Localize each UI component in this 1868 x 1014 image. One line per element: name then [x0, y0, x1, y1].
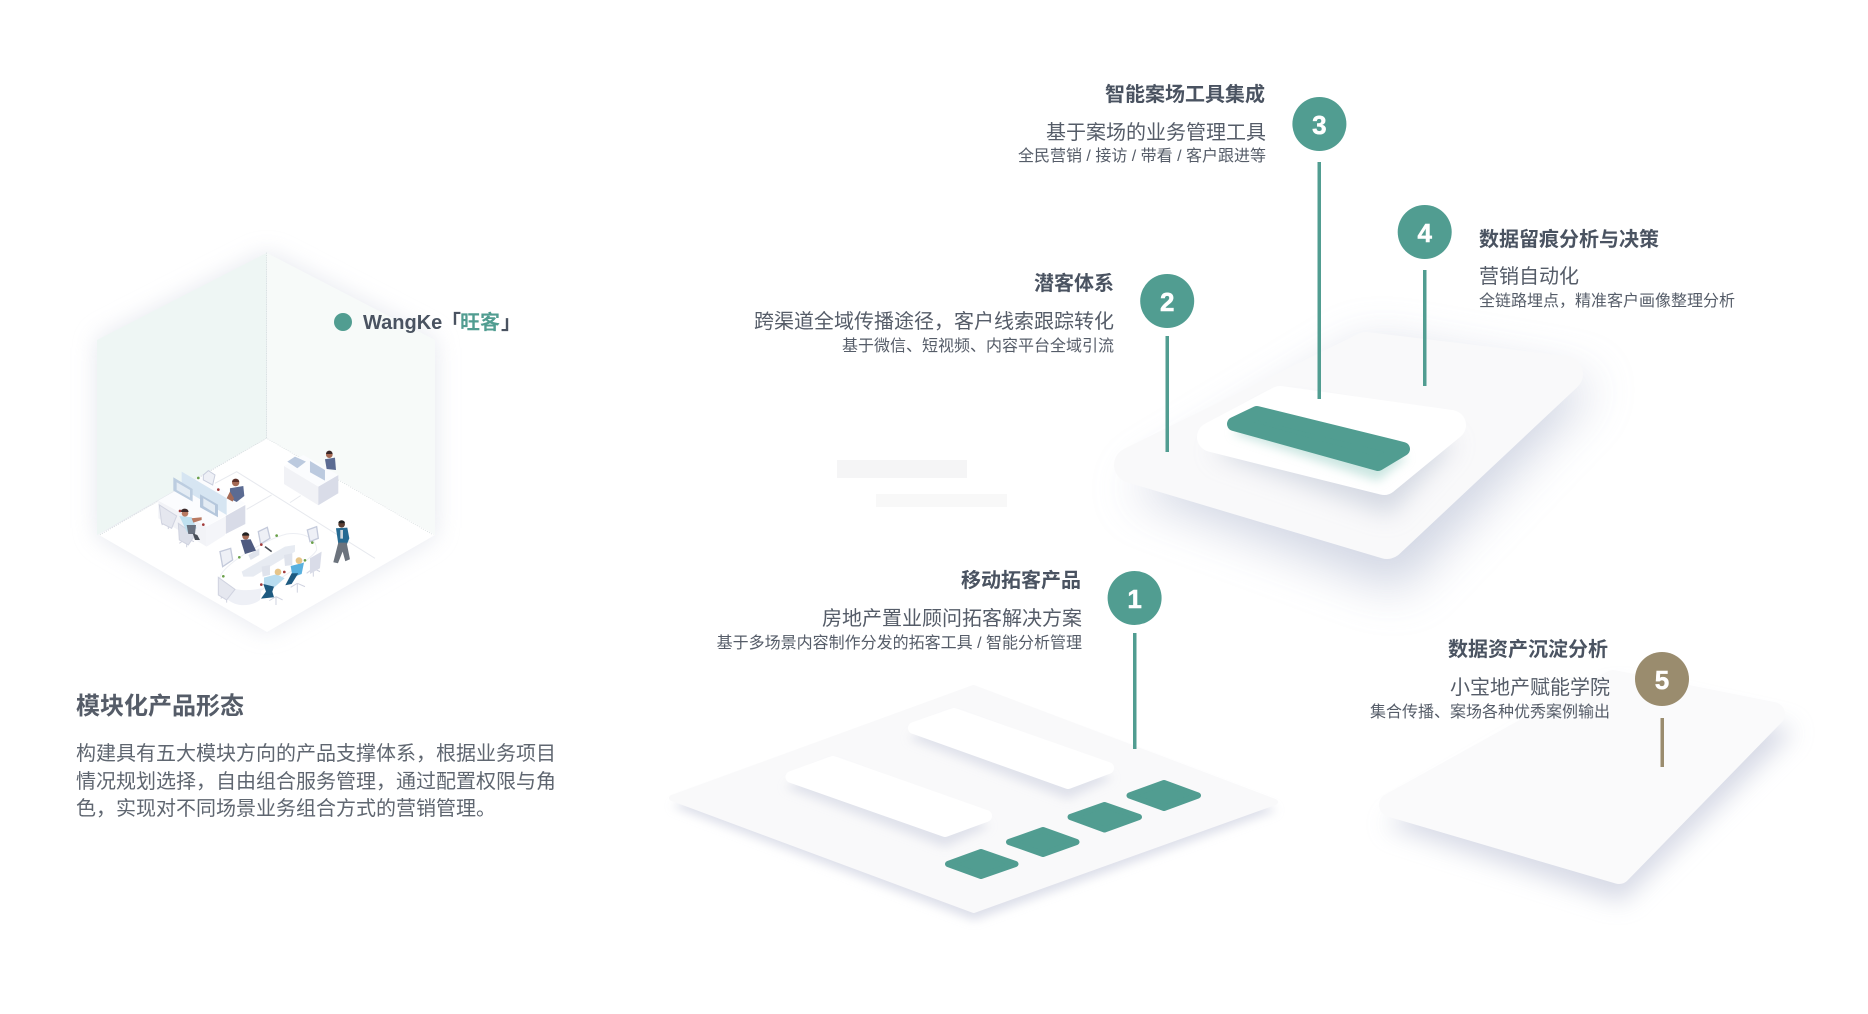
- callout 3: smart sales-office tools: [1018, 84, 1266, 165]
- callout 4: data trace analysis: [1479, 228, 1735, 310]
- panel: office room illustration: [97, 253, 435, 632]
- icon: brand dot: [334, 313, 352, 331]
- teal tiles: [948, 783, 1198, 876]
- callout 4 detail: 全链路埋点，精准客户画像整理分析: [1479, 293, 1735, 310]
- text block: description: 构建具有五大模块方向的产品支撑体系，根据业务项目: [76, 743, 556, 765]
- callout 2 title: 潜客体系: [1034, 273, 1114, 295]
- desk cluster left: [158, 471, 245, 547]
- marker 3: [1292, 97, 1346, 151]
- marker 3: 3: [1312, 110, 1327, 140]
- meeting table: [218, 527, 322, 605]
- person: walking with phone: [333, 520, 350, 563]
- panel: lower right platform: [1385, 682, 1795, 902]
- callout 2: potential customer system: [754, 272, 1114, 355]
- callout 1 subtitle: 房地产置业顾问拓客解决方案: [822, 608, 1082, 630]
- connector line 5: [1660, 718, 1664, 767]
- connector line 2: [1166, 336, 1169, 452]
- callout 1: mobile customer acquisition: [717, 570, 1082, 652]
- marker 1: [1108, 571, 1162, 625]
- callout 1 title: 移动拓客产品: [961, 570, 1081, 592]
- marker 1: 1: [1127, 584, 1142, 614]
- person: seated at desk top: [227, 479, 244, 502]
- callout 3 title: 智能案场工具集成: [1105, 84, 1265, 106]
- floor: [99, 438, 435, 632]
- connector line 4: [1423, 270, 1426, 386]
- marker 4: 4: [1417, 218, 1432, 248]
- callout 3 detail: 全民营销 / 接访 / 带看 / 客户跟进等: [1018, 148, 1266, 165]
- inner white card: [1212, 401, 1456, 515]
- white bar lower: [785, 762, 990, 847]
- teal bar: [1232, 413, 1408, 481]
- panel: lower left platform: [672, 688, 1277, 920]
- callout 4 subtitle: 营销自动化: [1479, 266, 1579, 288]
- left wall: [97, 253, 266, 535]
- marker 5: [1635, 652, 1689, 706]
- callout 4 title: 数据留痕分析与决策: [1479, 229, 1659, 251]
- callout 5: data asset analysis: [1370, 638, 1610, 721]
- connector line 3: [1318, 162, 1321, 399]
- callout 3 subtitle: 基于案场的业务管理工具: [1046, 122, 1266, 144]
- person: blond front: [261, 569, 285, 599]
- chairs for desk cluster: [162, 520, 320, 605]
- panel: upper platform: [1130, 345, 1595, 590]
- person: dark hair at table: [241, 532, 256, 554]
- marker 4: [1398, 205, 1452, 259]
- brand label: 旺客: [460, 312, 500, 334]
- placeholder bars: [837, 460, 1007, 507]
- brand label: 「: [441, 312, 461, 334]
- text block: description: 色，实现对不同场景业务组合方式的营销管理。: [76, 798, 496, 820]
- callout 2 detail: 基于微信、短视频、内容平台全域引流: [842, 338, 1114, 355]
- callout 5 subtitle: 小宝地产赋能学院: [1450, 677, 1610, 699]
- person: seated at desk front: [179, 509, 202, 540]
- marker 5: 5: [1655, 665, 1669, 695]
- brand label: [363, 312, 521, 334]
- brand label: 」: [501, 312, 521, 334]
- callout 2 subtitle: 跨渠道全域传播途径，客户线索跟踪转化: [754, 311, 1114, 333]
- person: blond rear: [285, 557, 304, 585]
- right wall: [267, 253, 435, 535]
- heading: modular product form: 模块化产品形态: [76, 693, 244, 720]
- connector line 1: [1133, 633, 1136, 749]
- brand label: WangKe: [363, 312, 442, 334]
- callout 1 detail: 基于多场景内容制作分发的拓客工具 / 智能分析管理: [717, 635, 1082, 652]
- callout 5 title: 数据资产沉淀分析: [1448, 639, 1608, 661]
- floor lines: [215, 472, 375, 558]
- marker 2: [1140, 274, 1194, 328]
- callout 5 detail: 集合传播、案场各种优秀案例输出: [1370, 704, 1610, 721]
- text block: description: 情况规划选择，自由组合服务管理，通过配置权限与角: [76, 770, 556, 792]
- marker 2: 2: [1160, 287, 1174, 317]
- white bar upper: [908, 714, 1113, 799]
- reception desk: [284, 451, 338, 505]
- text block: description: [76, 743, 556, 820]
